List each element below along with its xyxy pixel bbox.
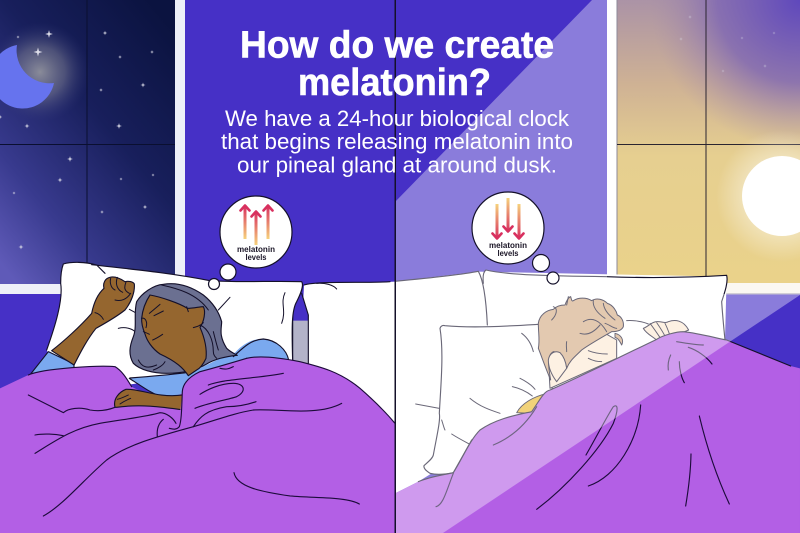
title: melatonin? [298,62,491,104]
icon: sun [716,130,800,262]
hand [643,321,689,343]
front pillow [424,324,553,474]
white bedding base [395,272,727,493]
icon: stars [0,30,155,250]
panel: day window [607,0,800,294]
thought bubble: melatonin levels rising [208,196,292,290]
face [548,333,617,388]
shirt [517,393,547,413]
hair [538,297,623,380]
shirt [129,339,289,398]
icon: up arrows [240,206,272,245]
icon: crescent moon [0,45,54,108]
thought bubble: melatonin levels rising: melatonin [237,245,275,254]
icon: faint stars [679,15,776,73]
panel divider [394,0,396,533]
lower arm [115,389,184,410]
hair strands [138,285,218,370]
main pillow [47,262,303,393]
blanket folds [28,358,359,516]
description text [221,106,573,178]
description text: that begins releasing melatonin into [221,129,573,154]
light beam [395,0,800,533]
side lock [615,333,623,345]
ear and features [548,352,567,382]
thought bubble: melatonin levels falling: levels [498,249,519,258]
blanket folds [436,342,729,509]
thought bubble: melatonin levels falling [472,192,559,284]
gap between pillows [293,293,308,365]
facial features [142,304,203,340]
description text: our pineal gland at around dusk. [237,152,557,178]
blanket fold over arm [173,367,220,432]
right-hand pillow [300,282,395,433]
icon: down arrows [492,198,524,238]
panel: left sleeper [0,262,395,533]
panel: night window [0,0,185,294]
pillow creases [118,283,337,332]
description text: We have a 24-hour biological clock [225,106,570,131]
title: How do we create [240,24,554,66]
pillow creases [416,321,648,444]
thought bubble: melatonin levels falling: melatonin [489,241,527,250]
raised arm [52,277,134,365]
face [142,295,206,376]
title [240,24,554,104]
sleeve [31,352,74,374]
thought bubble: melatonin levels rising: levels [246,253,267,262]
hair [130,284,237,373]
panel: right sleeper [395,270,800,533]
back pillow [483,270,727,340]
blanket [395,332,800,533]
blanket [0,357,395,533]
